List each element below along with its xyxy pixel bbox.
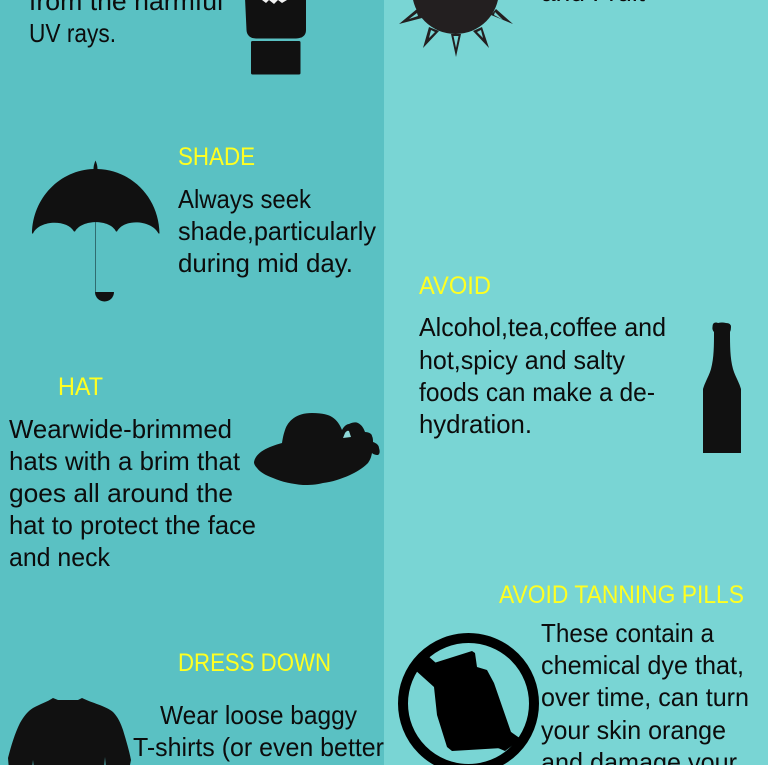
- heading: dress down: DRESS DOWN: [178, 649, 331, 677]
- text block: dress down: Wear loose baggy: [160, 700, 357, 730]
- icon: t-shirt: [8, 698, 131, 765]
- text block: hat: [9, 414, 256, 572]
- text block: hat: Wearwide-brimmed: [9, 414, 232, 444]
- text block: shade: shade,particularly: [178, 216, 376, 246]
- text block: tanning pills: over time, can turn: [541, 682, 749, 712]
- text block: sunscreen: UV rays.: [29, 18, 116, 48]
- icon: no pills: [403, 638, 534, 765]
- text block: hat: hats with a brim that: [9, 446, 241, 476]
- heading: shade: SHADE: [178, 143, 255, 171]
- text block: avoid: foods can make a de-: [419, 377, 655, 407]
- text block: avoid: Alcohol,tea,coffee and: [419, 312, 666, 342]
- text block: dress down: [133, 700, 384, 762]
- text block: dress down: T-shirts (or even better: [133, 732, 384, 762]
- heading: avoid tanning pills: AVOID TANNING PILLS: [499, 581, 744, 609]
- icon: sunscreen bottle: [245, 0, 306, 74]
- text block: shade: during mid day.: [178, 248, 353, 278]
- panel: right column background: [384, 0, 768, 765]
- text block: tanning pills: These contain a: [541, 618, 714, 648]
- text block: tanning pills: [541, 618, 749, 765]
- text block: sunscreen: [29, 0, 223, 48]
- text block: hat: goes all around the: [9, 478, 233, 508]
- text block: shade: [178, 184, 376, 278]
- text block: avoid: hot,spicy and salty: [419, 345, 625, 375]
- text block: shade: Always seek: [178, 184, 312, 214]
- icon: hat: [254, 413, 380, 485]
- heading: avoid: AVOID: [419, 272, 491, 300]
- panel: left column background: [0, 0, 384, 765]
- heading: hat: HAT: [58, 373, 103, 401]
- text block: tanning pills: your skin orange: [541, 715, 726, 745]
- icon: sun: [399, 0, 513, 57]
- text block: hat: and neck: [9, 542, 111, 572]
- icon: umbrella: [32, 160, 160, 302]
- text block: tanning pills: chemical dye that,: [541, 650, 744, 680]
- text block: avoid: hydration.: [419, 409, 532, 439]
- text block: hat: hat to protect the face: [9, 510, 256, 540]
- icon: bottle: [703, 322, 741, 453]
- text block: avoid: [419, 312, 666, 439]
